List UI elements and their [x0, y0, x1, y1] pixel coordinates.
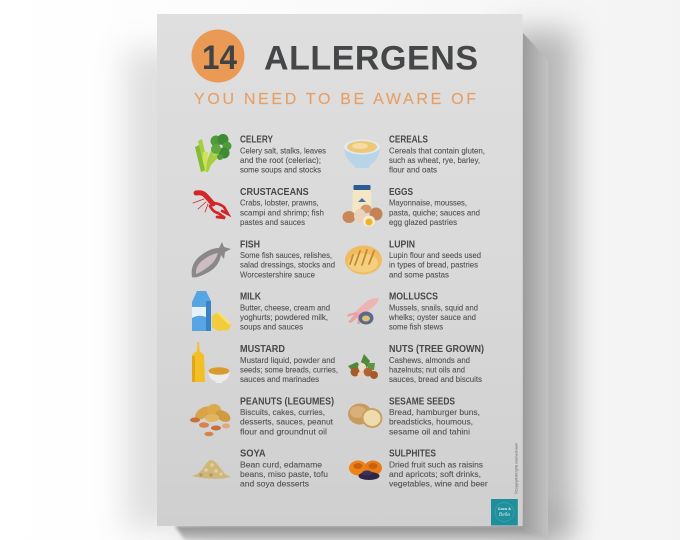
title: allergens: ALLERGENS: [264, 39, 478, 77]
description: beans, miso paste, tofu: [240, 469, 328, 479]
title badge: 14: [192, 30, 244, 82]
icon: lobster: [193, 193, 228, 218]
description: Mustard liquid, powder and: [240, 355, 335, 365]
description: [389, 250, 481, 279]
description: breadsticks, houmous,: [389, 417, 473, 427]
vertical copyright note: ©Copyright All rights reserved www: [514, 443, 518, 494]
description: Butter, cheese, cream and: [240, 302, 330, 312]
description: and the root (celeriac);: [240, 155, 321, 165]
description: soups and sauces: [240, 322, 303, 332]
description: Bean curd, edamame: [240, 460, 322, 470]
description: [389, 460, 488, 489]
heading: SULPHITES: [389, 449, 436, 460]
description: scampi and shrimp; fish: [240, 207, 324, 217]
allergen: peanuts: [190, 396, 334, 436]
description: Mussels, snails, squid and: [389, 302, 478, 312]
description: vegetables, wine and beer: [389, 479, 488, 489]
description: and soya desserts: [240, 479, 309, 489]
heading: MUSTARD: [240, 344, 285, 355]
logo: Bella: [499, 512, 510, 518]
allergen: eggs: [342, 185, 480, 227]
allergen: sesame seeds: [348, 396, 480, 436]
description: Bread, hamburger buns,: [389, 407, 480, 417]
heading: EGGS: [389, 187, 413, 198]
description: whelks; oyster sauce and: [388, 312, 476, 322]
icon: mustard bottle and bowl: [192, 342, 230, 383]
subtitle: YOU NEED TO BE AWARE OF: [194, 91, 476, 108]
poster panel: [157, 14, 522, 526]
description: [240, 460, 328, 489]
description: pastes and sauces: [240, 217, 305, 227]
description: Cereals that contain gluten,: [389, 145, 485, 155]
description: yoghurts; powdered milk,: [240, 312, 328, 322]
heading: SESAME SEEDS: [389, 396, 455, 407]
allergen: nuts: [348, 344, 484, 384]
description: [240, 355, 338, 384]
icon: milk carton and butter: [192, 291, 231, 331]
allergen: mustard: [192, 342, 338, 384]
icon: squid and mussel: [347, 298, 379, 324]
heading: MOLLUSCS: [389, 292, 438, 303]
description: Worcestershire sauce: [240, 269, 315, 279]
description: [389, 407, 480, 436]
description: and apricots; soft drinks,: [389, 469, 481, 479]
description: [240, 198, 324, 227]
logo: [491, 499, 518, 526]
heading: MILK: [240, 292, 262, 303]
description: flour and groundnut oil: [240, 426, 327, 436]
allergen: milk: [192, 291, 330, 332]
heading: CEREALS: [389, 134, 428, 146]
icon: dried fruit: [349, 460, 382, 480]
description: [389, 198, 480, 227]
description: [389, 145, 485, 174]
allergen: fish: [192, 239, 335, 279]
poster shadow: [125, 30, 573, 540]
icon: peanuts: [190, 404, 232, 436]
description: sauces, bread and biscuits: [389, 374, 482, 384]
description: flour and oats: [389, 164, 437, 174]
description: some fish stews: [389, 322, 443, 332]
description: [240, 407, 334, 436]
heading: LUPIN: [389, 239, 415, 250]
description: some soups and stocks: [240, 164, 321, 174]
description: Dried fruit such as raisins: [389, 460, 483, 470]
heading: FISH: [240, 239, 260, 250]
description: seeds; some breads, curries,: [240, 364, 338, 374]
allergen: molluscs: [347, 292, 478, 332]
icon: cereal bowl: [344, 140, 380, 168]
description: [240, 302, 330, 332]
description: such as wheat, rye, barley,: [389, 155, 480, 165]
description: [240, 250, 335, 279]
allergen: crustaceans: [193, 187, 324, 227]
icon: mayonnaise jar and eggs: [342, 185, 382, 226]
description: Some fish sauces, relishes,: [240, 250, 332, 260]
description: pasta, quiche; sauces and: [389, 207, 480, 217]
description: [388, 302, 478, 332]
icon: celery: [195, 134, 232, 172]
description: Crabs, lobster, prawns,: [240, 198, 319, 208]
description: Biscuits, cakes, curries,: [240, 407, 325, 417]
description: in types of bread, pastries: [389, 260, 478, 270]
description: and some pastas: [389, 269, 449, 279]
title badge: 14: 14: [202, 39, 237, 77]
description: Lupin flour and seeds used: [389, 250, 481, 260]
description: egg glazed pastries: [389, 217, 457, 227]
icon: bread loaf: [345, 246, 382, 274]
icon: fish: [192, 242, 231, 278]
description: [240, 145, 326, 174]
allergen: sulphites: [349, 449, 488, 489]
heading: CRUSTACEANS: [240, 187, 309, 198]
allergen: soya: [192, 449, 328, 489]
description: Cashews, almonds and: [389, 355, 470, 365]
heading: SOYA: [240, 449, 266, 460]
heading: CELERY: [240, 134, 273, 146]
description: desserts, sauces, peanut: [240, 417, 334, 427]
icon: soya beans: [192, 460, 231, 479]
icon: tree nuts: [348, 354, 378, 379]
icon: burger buns: [348, 404, 385, 430]
allergen: lupin: [345, 239, 481, 279]
description: sauces and marinades: [240, 374, 319, 384]
description: Mayonnaise, mousses,: [389, 198, 467, 208]
description: [389, 355, 482, 384]
heading: PEANUTS (LEGUMES): [240, 396, 334, 407]
description: hazelnuts; nut oils and: [389, 364, 465, 374]
allergen: celery: [195, 134, 326, 174]
heading: NUTS (TREE GROWN): [389, 344, 484, 355]
description: Celery salt, stalks, leaves: [240, 145, 326, 155]
logo: Coco &: [498, 507, 511, 511]
allergen: cereals: [344, 134, 485, 174]
description: sesame oil and tahini: [389, 426, 470, 436]
description: salad dressings, stocks and: [240, 260, 335, 270]
